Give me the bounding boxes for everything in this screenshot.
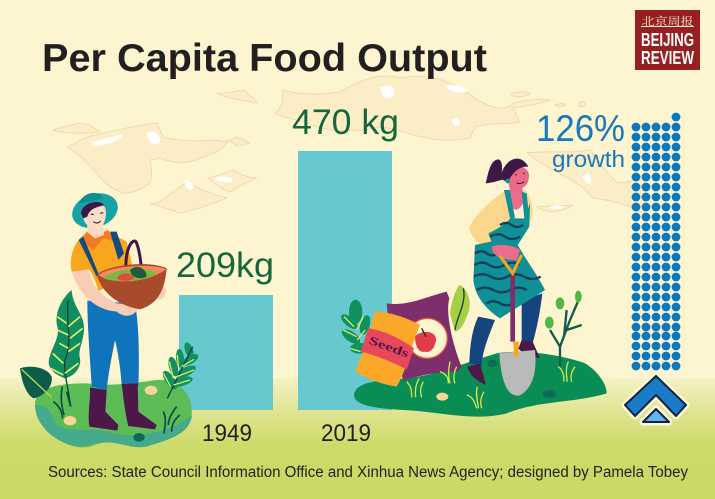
tall striped leaf — [49, 290, 84, 407]
face details — [91, 213, 103, 223]
cloud highlights — [92, 85, 591, 209]
shoes — [467, 364, 486, 385]
face details — [515, 173, 525, 184]
dot column chart — [632, 113, 680, 370]
value label: 209kg: 209kg — [176, 246, 274, 285]
title: Per Capita Food Output — [42, 37, 487, 80]
illustration: farmer with basket — [20, 188, 200, 447]
plant buds — [545, 291, 582, 329]
neck — [508, 182, 524, 210]
basket — [97, 241, 167, 309]
collar — [82, 230, 115, 250]
bar: 1949 — [179, 295, 273, 410]
growth label: growth — [552, 146, 625, 172]
hand — [492, 245, 520, 261]
logo: Beijing Review: BEIJING — [641, 30, 694, 50]
background world map clouds — [53, 76, 645, 215]
dark leaf — [20, 367, 52, 398]
arm and hand — [72, 269, 138, 316]
suspenders — [79, 232, 124, 277]
ground spots — [436, 360, 556, 401]
logo: Beijing Review — [635, 10, 700, 70]
earring — [505, 179, 510, 183]
shirt — [71, 233, 133, 292]
fern leaf — [160, 341, 200, 398]
icon: upward chevron arrow — [625, 376, 686, 422]
logo: Beijing Review: REVIEW — [641, 48, 694, 68]
head — [506, 167, 529, 189]
purple sack — [387, 292, 462, 381]
shovel — [499, 255, 536, 396]
small leaf plant behind bag — [339, 300, 372, 354]
value label: 470 kg: 470 kg — [292, 103, 399, 142]
grass tufts — [53, 387, 180, 433]
source line: Sources: State Council Information Office and Xinhua News Agency; designed by Pamela Tobey — [48, 464, 688, 481]
ground patch — [35, 380, 192, 447]
boots — [89, 383, 157, 431]
apron — [473, 190, 545, 318]
illustration: gardener woman with shovel and seed bags — [339, 159, 607, 417]
ground — [354, 352, 607, 417]
trousers — [87, 301, 139, 390]
seeds bag — [355, 312, 420, 387]
bar: 2019 — [298, 151, 392, 410]
cardigan and arm — [469, 190, 533, 252]
legs — [469, 317, 495, 367]
plant on right — [550, 297, 582, 367]
hair — [81, 202, 104, 218]
seeds bag: Seeds — [367, 333, 411, 361]
face — [83, 205, 106, 228]
neck — [87, 223, 104, 238]
year label: 1949: 1949 — [202, 420, 252, 447]
logo: Beijing Review: 北京周报 — [642, 14, 694, 28]
grass tufts — [407, 362, 575, 408]
white shirt — [507, 202, 527, 220]
hat — [68, 188, 122, 234]
green leaf right of bags — [450, 285, 470, 332]
growth figure: 126%: 126% — [536, 108, 625, 149]
hair and ponytail — [486, 159, 528, 183]
year label: 2019: 2019 — [321, 420, 371, 447]
